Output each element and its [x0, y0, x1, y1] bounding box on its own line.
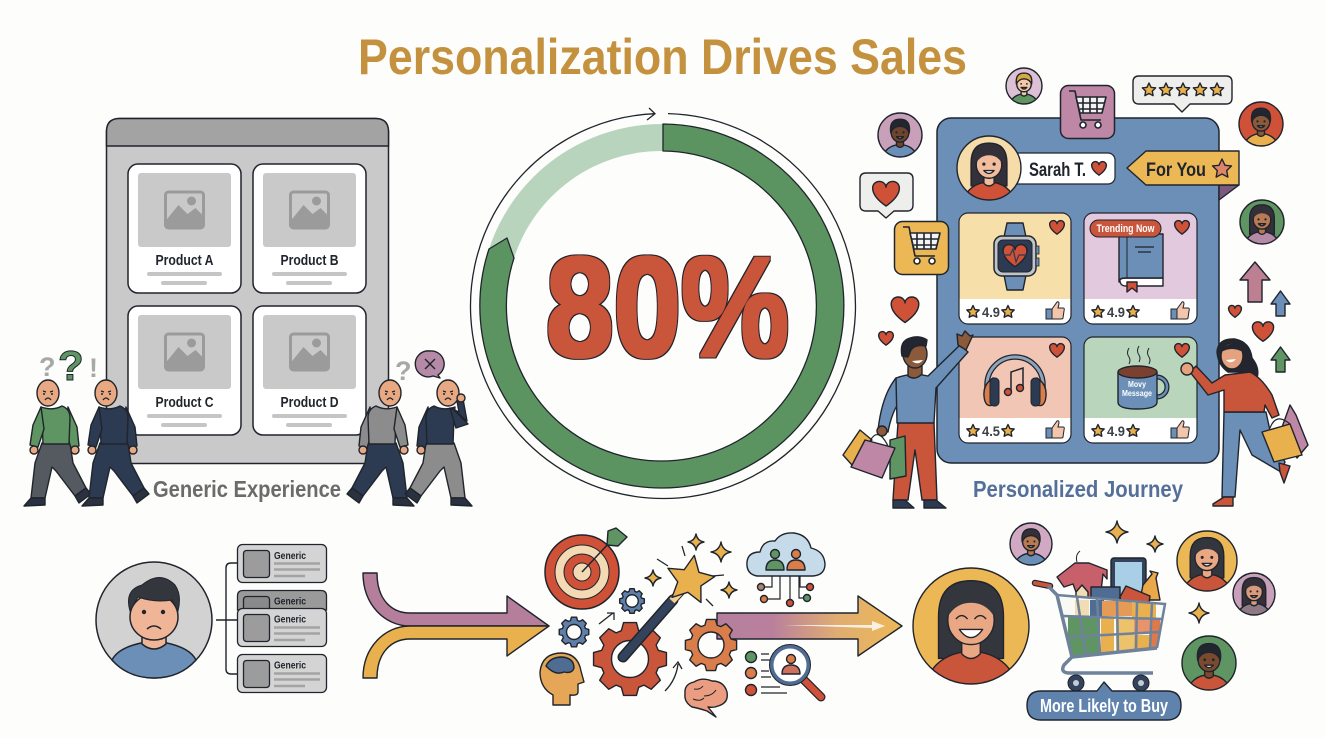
avatars: other customers [1010, 523, 1275, 707]
shopper in navy [82, 380, 149, 506]
floating hearts [879, 297, 1274, 345]
product card C [128, 306, 241, 435]
icon: blue gears [559, 589, 644, 647]
shopping bags [1262, 405, 1308, 462]
question marks [39, 342, 412, 389]
heading: personalized journey: Personalized Journey [973, 476, 1183, 502]
personalization engine icons [540, 528, 902, 717]
product: trending book: 4.9 [1107, 304, 1125, 320]
connector lines [216, 563, 237, 674]
For You ribbon [1127, 151, 1239, 200]
panel: generic experience [106, 118, 388, 502]
rejection bubble [415, 351, 444, 378]
product: smart watch [959, 213, 1071, 324]
product card B: Product B [280, 253, 338, 269]
For You ribbon: For You [1146, 160, 1206, 181]
happy customers and cart [913, 521, 1275, 721]
sparkles [1106, 521, 1209, 623]
avatar: unhappy user [96, 562, 212, 678]
question marks: ? [58, 342, 84, 389]
icon: full shopping cart [1035, 551, 1165, 691]
gradient arrow [717, 596, 902, 656]
product: headphones [959, 337, 1071, 443]
headphones icon [984, 357, 1046, 406]
generic card 4 [238, 654, 326, 692]
product card D: Product D [280, 395, 338, 411]
icon: magic wand [623, 534, 737, 657]
80 percent segment [480, 124, 844, 488]
merging arrows [363, 573, 549, 678]
browser window [106, 118, 388, 464]
avatars around panel [878, 68, 1284, 258]
heading: generic experience: Generic Experience [153, 476, 341, 502]
generic card 1 [238, 544, 326, 582]
title: Personalization Drives Sales [358, 29, 967, 85]
product: headphones: 4.5 [982, 423, 1000, 439]
generic user with identical content [96, 544, 326, 692]
icon: brain [685, 679, 727, 717]
generic card 4: Generic [274, 660, 306, 672]
confused shoppers [24, 342, 472, 506]
product: trending book [1084, 213, 1197, 324]
rating bubble [1133, 76, 1232, 112]
generic card 3 [238, 608, 326, 646]
callout: more likely to buy [1027, 682, 1181, 720]
upward arrows [1240, 262, 1290, 372]
name pill: Sarah T. [1010, 153, 1115, 184]
trending pill: Trending Now [1096, 223, 1155, 235]
80% figure: 80% [546, 228, 789, 387]
progress ring: 80% [470, 108, 855, 499]
heart bubble [860, 173, 913, 218]
shopper scratching head [405, 380, 472, 506]
cart tile: top [1060, 86, 1114, 138]
generic card 3: Generic [274, 614, 306, 626]
icon: audience cloud [747, 533, 825, 606]
watch icon [994, 223, 1039, 290]
shopper in green [24, 380, 91, 506]
small process arrows [599, 613, 682, 691]
generic card 2, behind [238, 590, 326, 610]
panel: personalized journey [843, 68, 1308, 508]
blue app panel [937, 118, 1219, 463]
cart tile: left [894, 222, 948, 274]
mug icon [1118, 346, 1167, 409]
generic card 2, behind: Generic [274, 596, 306, 608]
product: smart watch: 4.9 [982, 304, 1000, 320]
icon: orange gear [685, 619, 737, 671]
icon: head with brain [540, 653, 584, 705]
name pill: Sarah T.: Sarah T. [1029, 160, 1086, 181]
product: mug [1084, 337, 1197, 443]
remaining segment [489, 124, 663, 258]
product card A [128, 164, 241, 293]
icon: red gear [594, 623, 666, 695]
generic card 1: Generic [274, 550, 306, 562]
product card D [253, 306, 366, 435]
avatar: happy customer [913, 568, 1029, 721]
callout: more likely to buy: More Likely to Buy [1040, 696, 1168, 716]
mug icon: Movy [1128, 379, 1146, 389]
book icon [1119, 234, 1163, 292]
shopping bags [843, 426, 906, 479]
product card C: Product C [156, 395, 214, 411]
product card B [253, 164, 366, 293]
icon: target [545, 528, 627, 609]
question marks: ? [395, 356, 412, 386]
outer circular arrow [470, 108, 855, 499]
shopper in gray [347, 380, 414, 506]
product: mug: 4.9 [1107, 423, 1125, 439]
shopper: man waving [843, 331, 973, 508]
icon: list with magnifier [746, 644, 821, 697]
shopper: woman with bags [1181, 339, 1308, 506]
mug icon: Message [1122, 388, 1152, 398]
question marks: ! [89, 353, 98, 383]
question marks: ? [39, 352, 56, 382]
product card A: Product A [156, 253, 214, 269]
avatar: Sarah [957, 136, 1021, 220]
